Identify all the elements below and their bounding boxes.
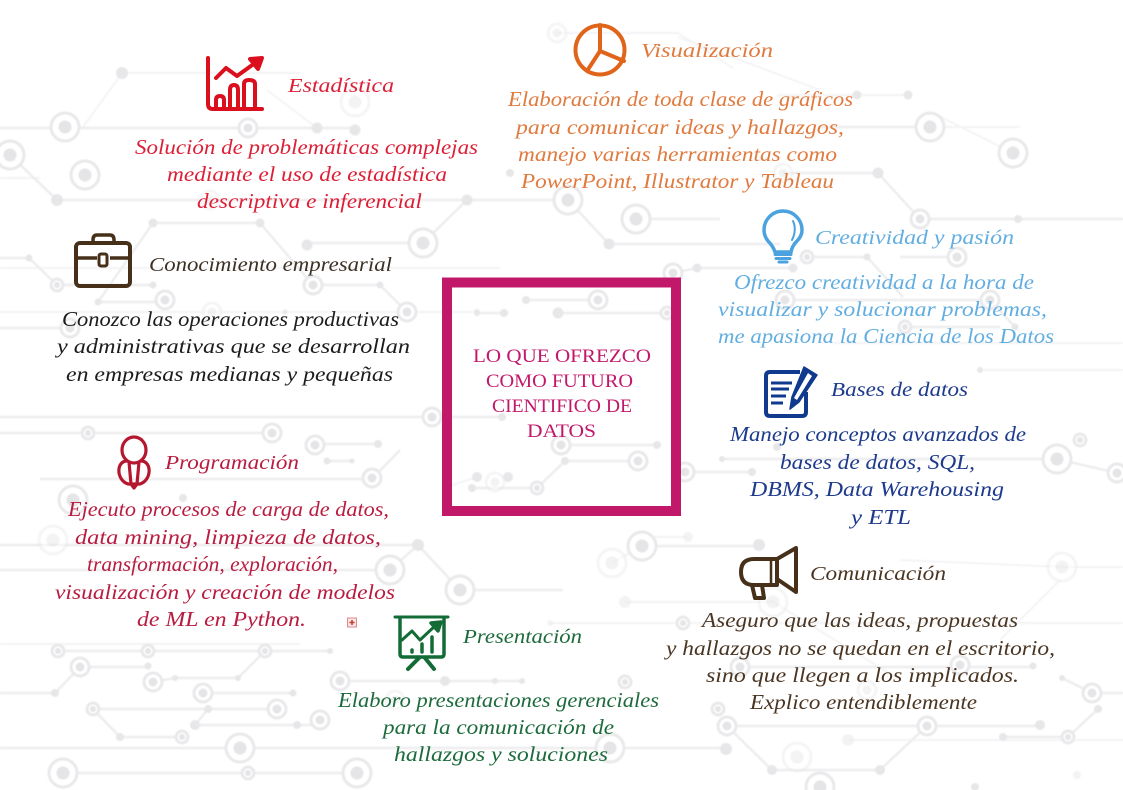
panel: Visualización <box>507 25 853 193</box>
text block: Conocimiento empresarial: Conozco las operaciones productivas <box>62 307 399 331</box>
text block: Conocimiento empresarial: en empresas medianas y pequeñas <box>66 362 393 386</box>
heading: Conocimiento empresarial: Conocimiento empresarial <box>149 254 393 276</box>
text block: Comunicación: Explico entendiblemente <box>749 690 977 714</box>
text block: Creatividad y pasión: visualizar y solucionar problemas, <box>718 297 1047 321</box>
text block: Programación: transformación, exploración, <box>87 552 338 576</box>
text block: Creatividad y pasión: Ofrezco creatividad a la hora de <box>734 270 1034 294</box>
text block: Comunicación: y hallazgos no se quedan en el escritorio, <box>664 636 1055 660</box>
icon: notepad with pencil <box>766 367 817 416</box>
text block: Creatividad y pasión <box>718 270 1054 348</box>
heading: Visualización: Visualización <box>641 40 773 62</box>
center title: COMO FUTURO <box>486 371 633 392</box>
text block: Visualización <box>507 87 853 193</box>
text block: Comunicación: Aseguro que las ideas, propuestas <box>700 608 1018 632</box>
text block: Conocimiento empresarial: y administrativas que se desarrollan <box>55 334 410 358</box>
heading: Estadística: Estadística <box>287 75 394 97</box>
text block: Bases de datos: DBMS, Data Warehousing <box>749 477 1004 501</box>
panel: Presentación <box>337 617 659 766</box>
panel: Comunicación <box>664 548 1055 714</box>
panel: Conocimiento empresarial <box>55 235 410 386</box>
icon: presentation board <box>395 617 448 669</box>
icon: briefcase <box>76 235 130 286</box>
center title: LO QUE OFREZCO <box>473 346 651 367</box>
text block: Programación: de ML en Python. <box>137 607 306 631</box>
text block: Visualización: para comunicar ideas y hallazgos, <box>514 115 844 139</box>
text block: Presentación: para la comunicación de <box>381 715 614 739</box>
text block: Bases de datos: bases de datos, SQL, <box>780 450 975 474</box>
text block: Presentación: hallazgos y soluciones <box>394 742 608 766</box>
heading: Bases de datos: Bases de datos <box>831 379 968 401</box>
text block: Creatividad y pasión: me apasiona la Ciencia de los Datos <box>718 324 1054 348</box>
text block: Comunicación: sino que llegen a los implicados. <box>706 663 1019 687</box>
panel: Estadística <box>135 58 478 213</box>
text block: Conocimiento empresarial <box>55 307 410 386</box>
text block: Programación: Ejecuto procesos de carga de datos, <box>67 497 389 521</box>
text block: Visualización: Elaboración de toda clase de gráficos <box>507 87 853 111</box>
text block: Bases de datos: Manejo conceptos avanzados de <box>729 422 1026 446</box>
text block: Programación: visualización y creación de modelos <box>55 580 395 604</box>
panel: Creatividad y pasión <box>718 211 1054 348</box>
heading: Comunicación: Comunicación <box>810 563 946 585</box>
text block: Estadística: descriptiva e inferencial <box>197 189 422 213</box>
center title: CIENTIFICO DE <box>492 396 632 417</box>
heading: Presentación: Presentación <box>462 626 582 648</box>
text block: Bases de datos <box>729 422 1026 529</box>
text block: Visualización: manejo varias herramientas como <box>518 142 837 166</box>
icon: rising bar chart <box>208 58 262 109</box>
icon: pie chart <box>576 25 624 74</box>
heading: Programación: Programación <box>164 452 299 474</box>
panel: Programación <box>55 437 395 631</box>
text block: Presentación: Elaboro presentaciones gerenciales <box>337 688 659 712</box>
text block: Presentación <box>337 688 659 766</box>
center box <box>447 282 676 511</box>
text block: Estadística <box>135 135 478 213</box>
icon: light bulb <box>764 211 802 262</box>
icon: megaphone <box>741 548 796 598</box>
text block: Visualización: PowerPoint, Illustrator y Tableau <box>520 169 834 193</box>
text block: Comunicación <box>664 608 1055 714</box>
panel: Bases de datos <box>729 367 1026 529</box>
text block: Estadística: Solución de problemáticas complejas <box>135 135 478 159</box>
icon: small plus marker <box>348 618 356 627</box>
text block: Estadística: mediante el uso de estadística <box>167 162 447 186</box>
text block: Programación: data mining, limpieza de datos, <box>75 525 381 549</box>
heading: Creatividad y pasión: Creatividad y pasión <box>815 227 1014 249</box>
text block: Bases de datos: y ETL <box>849 505 911 529</box>
text block: Programación <box>55 497 395 631</box>
center title <box>473 346 651 442</box>
icon: person with tie <box>119 437 149 488</box>
center title: DATOS <box>527 421 596 442</box>
